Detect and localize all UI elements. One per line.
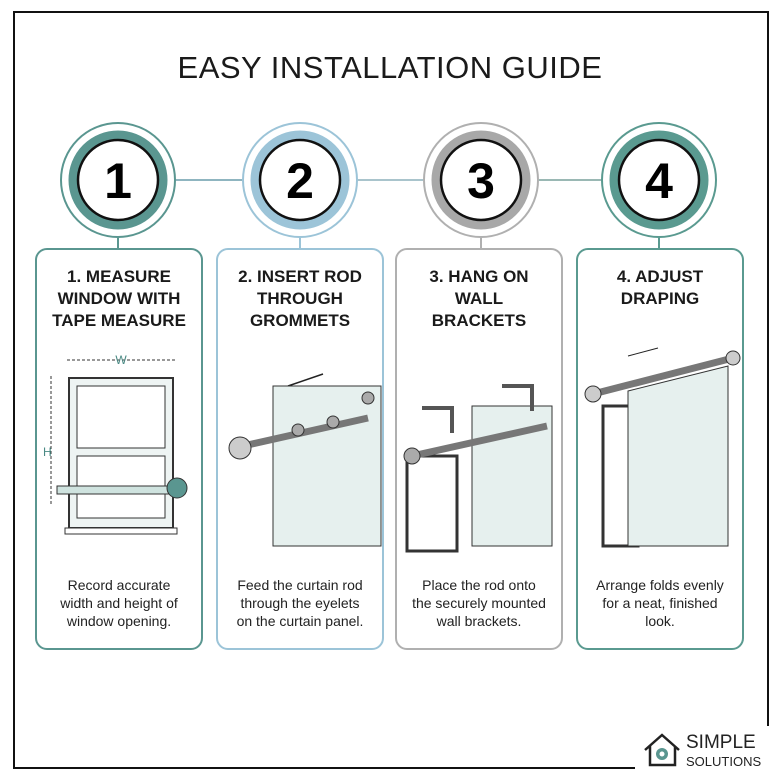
heading 2 — [238, 267, 362, 330]
heading 2: THROUGH — [257, 289, 343, 308]
title: EASY INSTALLATION GUIDE — [178, 50, 602, 85]
logo text: SIMPLE — [686, 732, 756, 753]
illustration: window measure — [43, 353, 188, 534]
step circles — [60, 122, 717, 238]
circle 2: 2 — [286, 153, 314, 209]
heading 1: TAPE MEASURE — [52, 311, 186, 330]
circle 1 — [61, 123, 175, 237]
heading 2: GROMMETS — [250, 311, 350, 330]
illustration: rod through grommets — [228, 373, 382, 546]
heading 1 — [52, 267, 186, 330]
heading 4: DRAPING — [621, 289, 699, 308]
circle 3 — [424, 123, 538, 237]
panel: step 4 — [576, 248, 744, 650]
heading 2: 2. INSERT ROD — [238, 267, 362, 286]
logo text: SOLUTIONS — [686, 754, 761, 769]
logo — [644, 732, 761, 769]
circle 4: 4 — [645, 153, 673, 209]
heading 3: 3. HANG ON — [429, 267, 529, 286]
heading 1: WINDOW WITH — [58, 289, 180, 308]
caption 2: Feed the curtain rod through the eyelets on the curtain panel. — [237, 577, 363, 629]
panel: step 1 — [35, 248, 203, 650]
circle 3: 3 — [467, 153, 495, 209]
caption 3: Place the rod onto the securely mounted wall brackets. — [412, 577, 546, 629]
heading 4 — [617, 267, 703, 308]
logo text — [686, 732, 761, 769]
circle 2 — [243, 123, 357, 237]
circle 4 — [602, 123, 716, 237]
illustration: window measure: W — [115, 353, 127, 367]
illustration: draping — [584, 348, 740, 548]
icon: house gear — [644, 734, 680, 766]
circle 1: 1 — [104, 153, 132, 209]
panel: step 2 — [216, 248, 384, 650]
heading 3: BRACKETS — [432, 311, 526, 330]
heading 1: 1. MEASURE — [67, 267, 171, 286]
caption 1: Record accurate width and height of window opening. — [60, 577, 178, 629]
caption 4: Arrange folds evenly for a neat, finished look. — [596, 577, 724, 629]
panel: step 3 — [395, 248, 563, 650]
illustration: brackets — [404, 384, 552, 552]
heading 4: 4. ADJUST — [617, 267, 703, 286]
heading 3: WALL — [455, 289, 503, 308]
illustration: window measure: H — [43, 445, 52, 459]
heading 3 — [429, 267, 529, 330]
